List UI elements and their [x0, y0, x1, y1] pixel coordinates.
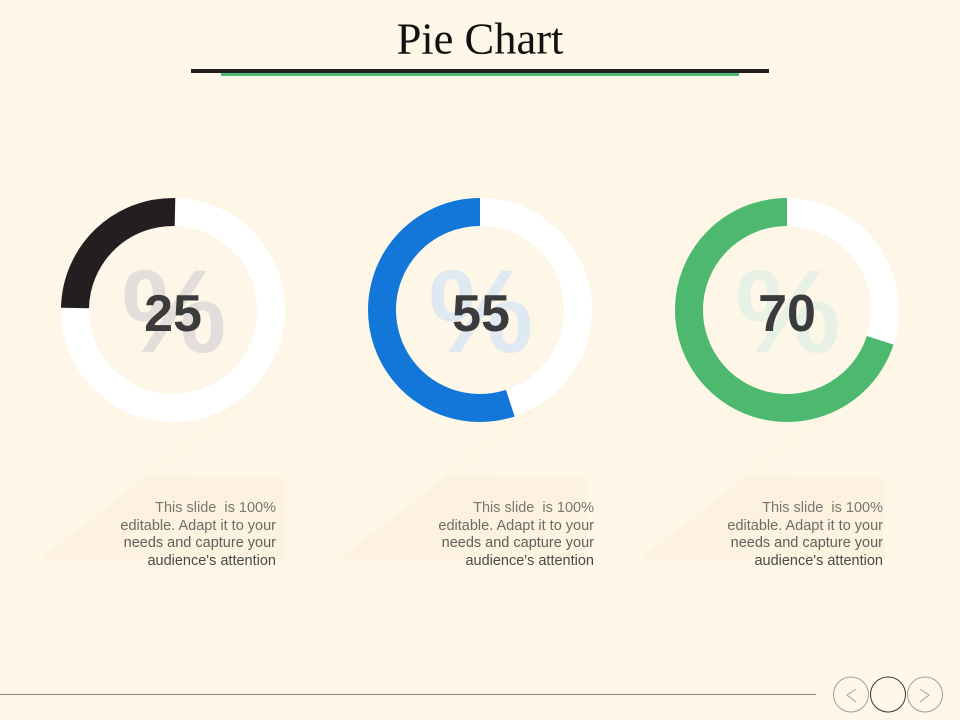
footer line	[0, 694, 816, 696]
description: editable. Adapt it to your	[727, 518, 883, 534]
value: 70	[758, 285, 816, 343]
callout shape	[640, 405, 884, 559]
title: Pie Chart	[397, 14, 564, 64]
donut chart 55	[382, 212, 578, 408]
callout shape	[40, 405, 285, 559]
description: editable. Adapt it to your	[438, 518, 594, 534]
panel: 55 percent	[340, 212, 594, 569]
description	[120, 500, 276, 569]
description	[727, 500, 883, 569]
panel: 70 percent	[640, 212, 885, 569]
description: needs and capture your	[442, 535, 594, 551]
value: 55	[452, 285, 510, 343]
description: needs and capture your	[124, 535, 276, 551]
description: needs and capture your	[731, 535, 883, 551]
description: editable. Adapt it to your	[120, 518, 276, 534]
navigation: centre button	[870, 677, 906, 712]
donut chart 70	[689, 212, 885, 408]
description: This slide is 100%	[762, 500, 883, 516]
percent watermark: %	[429, 246, 533, 378]
description: audience's attention	[147, 553, 276, 569]
panel: 25 percent	[40, 212, 285, 569]
navigation: next button	[908, 677, 942, 712]
callout shape	[340, 405, 587, 559]
description: audience's attention	[754, 553, 883, 569]
navigation: previous button	[834, 677, 868, 712]
description: audience's attention	[465, 553, 594, 569]
description	[438, 500, 594, 569]
description: This slide is 100%	[155, 500, 276, 516]
value: 25	[144, 285, 202, 343]
percent watermark: %	[736, 246, 840, 378]
donut chart 25	[75, 212, 271, 408]
percent watermark: %	[122, 246, 226, 378]
title underline	[191, 69, 769, 76]
description: This slide is 100%	[473, 500, 594, 516]
